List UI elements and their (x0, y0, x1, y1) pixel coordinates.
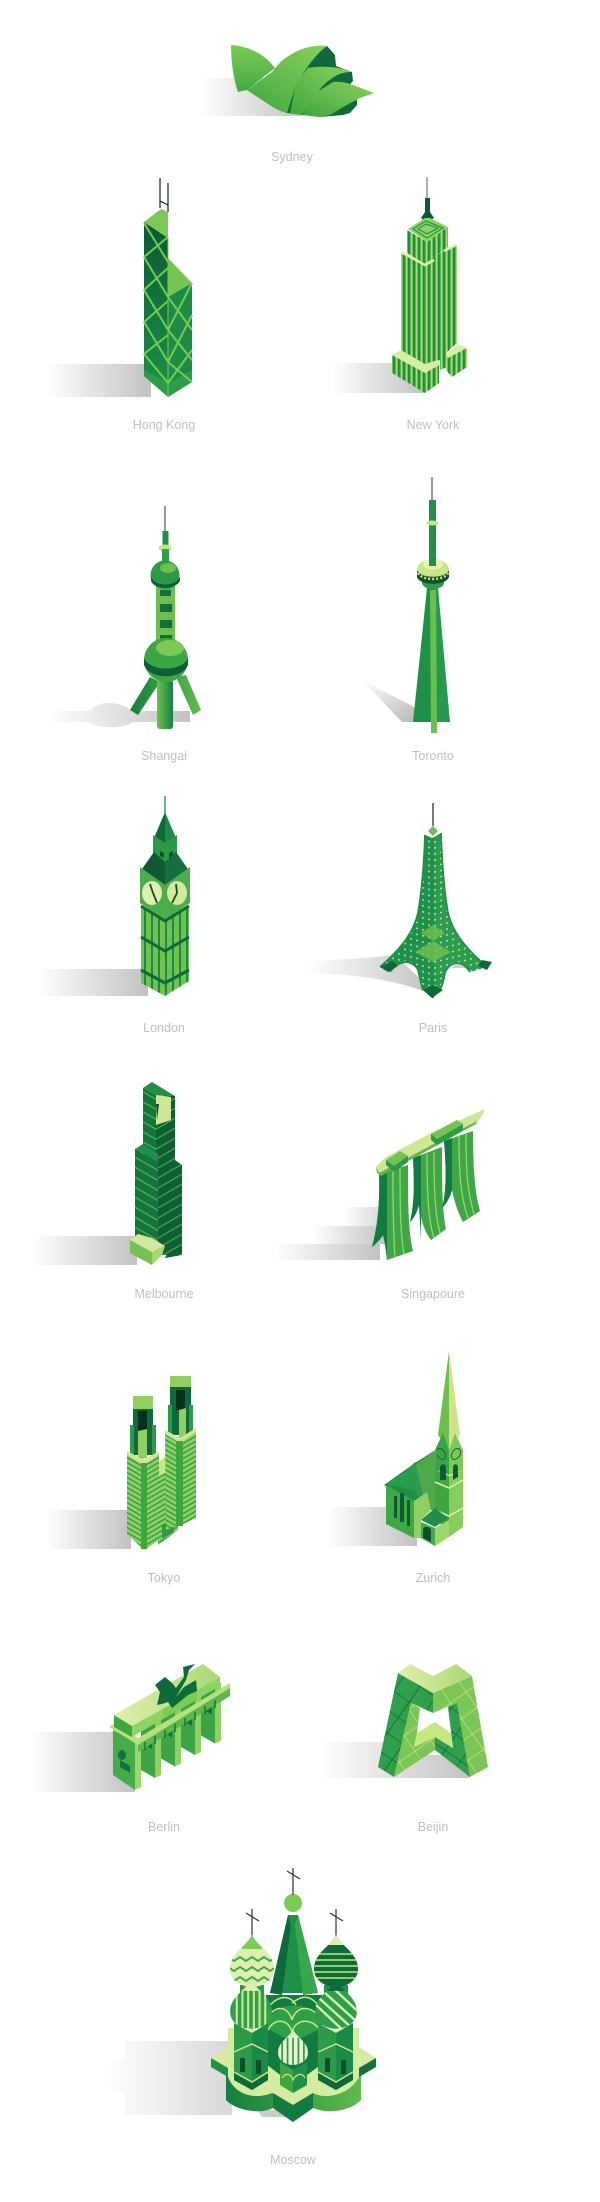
right back dome with rings (314, 1935, 358, 1986)
lower block (135, 1149, 158, 1250)
landmark: Zurich church (327, 1351, 463, 1546)
roof (142, 852, 165, 885)
legs (130, 675, 201, 715)
tower top (428, 826, 438, 836)
base ledge (392, 350, 439, 373)
tower windows (440, 1464, 458, 1480)
label: Shangai: Shangai (141, 749, 187, 763)
shadow: London (38, 969, 148, 996)
roof (144, 209, 168, 238)
upper sphere (150, 560, 180, 590)
clock hands (150, 884, 177, 903)
upper disc (426, 520, 438, 526)
clock faces (142, 881, 162, 905)
clock section (140, 867, 190, 920)
center top ball (284, 1894, 302, 1912)
shadow: Sydney (202, 78, 302, 116)
upper shaft (162, 531, 168, 548)
left tower crown (133, 1396, 153, 1409)
upper tower left (143, 1088, 156, 1260)
left tower windows (240, 2058, 261, 2074)
landmark: Singapore Marina Bay Sands (275, 1109, 485, 1260)
right wing (446, 348, 467, 377)
landmark: Moscow Saint Basil's Cathedral (107, 1868, 376, 2122)
label: Paris: Paris (419, 1021, 447, 1035)
roof edge (143, 1082, 175, 1096)
left back neck (240, 1985, 264, 2000)
front point side (273, 2093, 313, 2122)
dentils (145, 1700, 215, 1750)
tower shade strips (372, 1138, 452, 1260)
pier 3 (161, 1700, 181, 1766)
small disc (158, 544, 172, 552)
left tower base band (234, 2072, 268, 2090)
pier 2 (141, 1712, 161, 1778)
cone rib (430, 590, 437, 733)
shadow: Moscow (107, 2041, 300, 2117)
nave wall right (414, 1492, 431, 1538)
dark interior backing (247, 46, 357, 117)
landmark: Berlin Brandenburg Gate (30, 1664, 230, 1792)
feet (380, 960, 492, 998)
base lower lobes (226, 2075, 361, 2122)
landmark: London Big Ben (38, 796, 190, 996)
front left dome (230, 1980, 272, 2029)
landmark: Toronto CN Tower (362, 477, 450, 733)
right face (168, 283, 192, 397)
shadow: Tokyo (46, 1510, 131, 1549)
landmark: Sydney opera house (202, 45, 374, 117)
inner roof (414, 1722, 453, 1748)
inner left wall and lower leg (394, 1703, 435, 1777)
lower right dark leg (435, 1703, 470, 1777)
antenna (426, 177, 428, 198)
tower 2 (410, 1147, 446, 1240)
front right dome (315, 1980, 357, 2029)
middle shell (247, 46, 327, 113)
left tower body (127, 1453, 143, 1549)
outer frame (380, 833, 487, 998)
cornice (109, 1683, 230, 1745)
back lobes (228, 2028, 359, 2050)
center cross (287, 1868, 300, 1895)
stepped crown (408, 218, 448, 242)
nave roof (384, 1449, 437, 1505)
tower 3 (442, 1131, 480, 1222)
middle shaft (401, 252, 425, 367)
label: Beijin: Beijin (418, 1820, 448, 1834)
shadow: Paris (307, 955, 432, 992)
label: Toronto: Toronto (412, 749, 454, 763)
spire needle (164, 796, 166, 820)
base band (144, 370, 192, 397)
antenna (164, 506, 166, 531)
sky park pods (386, 1151, 408, 1166)
panel slit (156, 1104, 159, 1120)
third shell (290, 67, 352, 115)
deck (415, 925, 451, 962)
outer right light face (433, 1676, 488, 1777)
left back cross (246, 1909, 259, 1936)
upper shaft (429, 500, 436, 560)
left wing side (211, 2058, 228, 2077)
porch (421, 1508, 448, 1527)
wing shaft (425, 245, 457, 370)
left back dome with waves (230, 1935, 274, 1987)
landmark: New York Empire State Building (332, 177, 467, 393)
antenna (431, 477, 433, 500)
shadow: Berlin (30, 1732, 135, 1792)
right back neck (324, 1985, 348, 2000)
entrance (162, 1518, 174, 1539)
right tower body (165, 1432, 178, 1530)
shadows: Singapore (275, 1207, 404, 1260)
right tower crown (170, 1376, 191, 1387)
ground shadow right (452, 958, 480, 968)
cone (413, 588, 433, 722)
column decks (160, 590, 172, 643)
left front tower (234, 2023, 252, 2090)
spire (421, 198, 434, 222)
label: Berlin: Berlin (148, 1820, 180, 1834)
landmark: Melbourne tower (32, 1082, 182, 1265)
right tower windows (325, 2058, 346, 2074)
right tower base band (318, 2072, 353, 2090)
base right (425, 365, 439, 393)
landmark: Paris Eiffel Tower (307, 803, 492, 998)
landmark: Shanghai Oriental Pearl tower (48, 506, 201, 729)
right lattice face (432, 833, 487, 998)
front shell (303, 82, 374, 117)
small front column (280, 2062, 293, 2093)
right front tower (318, 2023, 336, 2090)
label: London: London (143, 1021, 185, 1035)
pier 5 (201, 1678, 221, 1744)
star plate top (211, 2030, 376, 2105)
left lattice face (380, 835, 432, 998)
outer left dark face (378, 1673, 433, 1777)
landmark: Tokyo Metropolitan Government Building (46, 1376, 196, 1549)
label: Hong Kong: Hong Kong (133, 418, 195, 432)
spire (154, 812, 165, 845)
central arches (266, 2006, 322, 2042)
upper tower right (156, 1095, 175, 1255)
right tower trim (318, 2044, 353, 2082)
shadow: Shanghai (48, 703, 190, 727)
shadow: New York (332, 363, 425, 393)
attic top (114, 1664, 220, 1726)
central body (266, 1995, 322, 2085)
label: Tokyo: Tokyo (148, 1571, 180, 1585)
pod (422, 577, 444, 589)
pier 1 (113, 1730, 135, 1790)
center spire (270, 1915, 318, 1993)
base box (130, 1234, 165, 1252)
tower ribs (393, 1134, 474, 1258)
landmark: Hong Kong Bank of China tower (46, 178, 192, 397)
sky park (376, 1109, 485, 1174)
tower bands (435, 1480, 463, 1516)
right wing side (359, 2058, 376, 2077)
body bands (141, 906, 189, 983)
shadow: Hong Kong (46, 364, 151, 397)
spire (438, 1351, 449, 1450)
body (141, 906, 165, 996)
gable left (435, 1433, 449, 1475)
label: Singapoure: Singapoure (401, 1287, 465, 1301)
porch door (423, 1527, 431, 1542)
upper shaft (407, 227, 448, 264)
lower sphere (144, 638, 188, 682)
pier 1 openings (118, 1750, 130, 1773)
right back cross (330, 1909, 343, 1936)
tower (435, 1470, 449, 1530)
antenna (432, 803, 434, 826)
nave wall left (386, 1485, 414, 1538)
shadow: Zurich (327, 1507, 417, 1546)
tower 1 (372, 1165, 413, 1260)
ledge highlights (401, 245, 456, 265)
left tower trim (234, 2044, 268, 2082)
pier 4 (181, 1689, 201, 1755)
belfry (153, 835, 177, 870)
lattice lines (144, 223, 192, 383)
label: Moscow: Moscow (270, 2153, 317, 2167)
label: Zurich: Zurich (416, 1571, 450, 1585)
attic front (114, 1715, 132, 1737)
antennas (160, 178, 168, 212)
landmark: Beijing CCTV building (320, 1664, 488, 1778)
nave windows (394, 1493, 410, 1526)
right block (165, 1160, 182, 1258)
light panel (156, 1095, 171, 1125)
column (156, 585, 175, 643)
base left (392, 355, 425, 393)
shadow: Beijing (320, 1742, 470, 1778)
quadriga (155, 1664, 197, 1708)
label: Melbourne: Melbourne (134, 1287, 194, 1301)
gable right (449, 1433, 463, 1475)
top roof (398, 1664, 472, 1693)
shadow: Toronto (362, 680, 416, 722)
left face (144, 222, 168, 397)
small front dome (278, 2030, 308, 2065)
label: New York: New York (407, 418, 460, 432)
left shell (231, 45, 275, 92)
gable leaf outlines (435, 1447, 447, 1461)
shadow: Melbourne (32, 1236, 137, 1265)
attic centre block (163, 1690, 197, 1719)
central block (158, 1465, 178, 1545)
label: Sydney: Sydney (271, 150, 314, 164)
right step roof (168, 258, 192, 297)
